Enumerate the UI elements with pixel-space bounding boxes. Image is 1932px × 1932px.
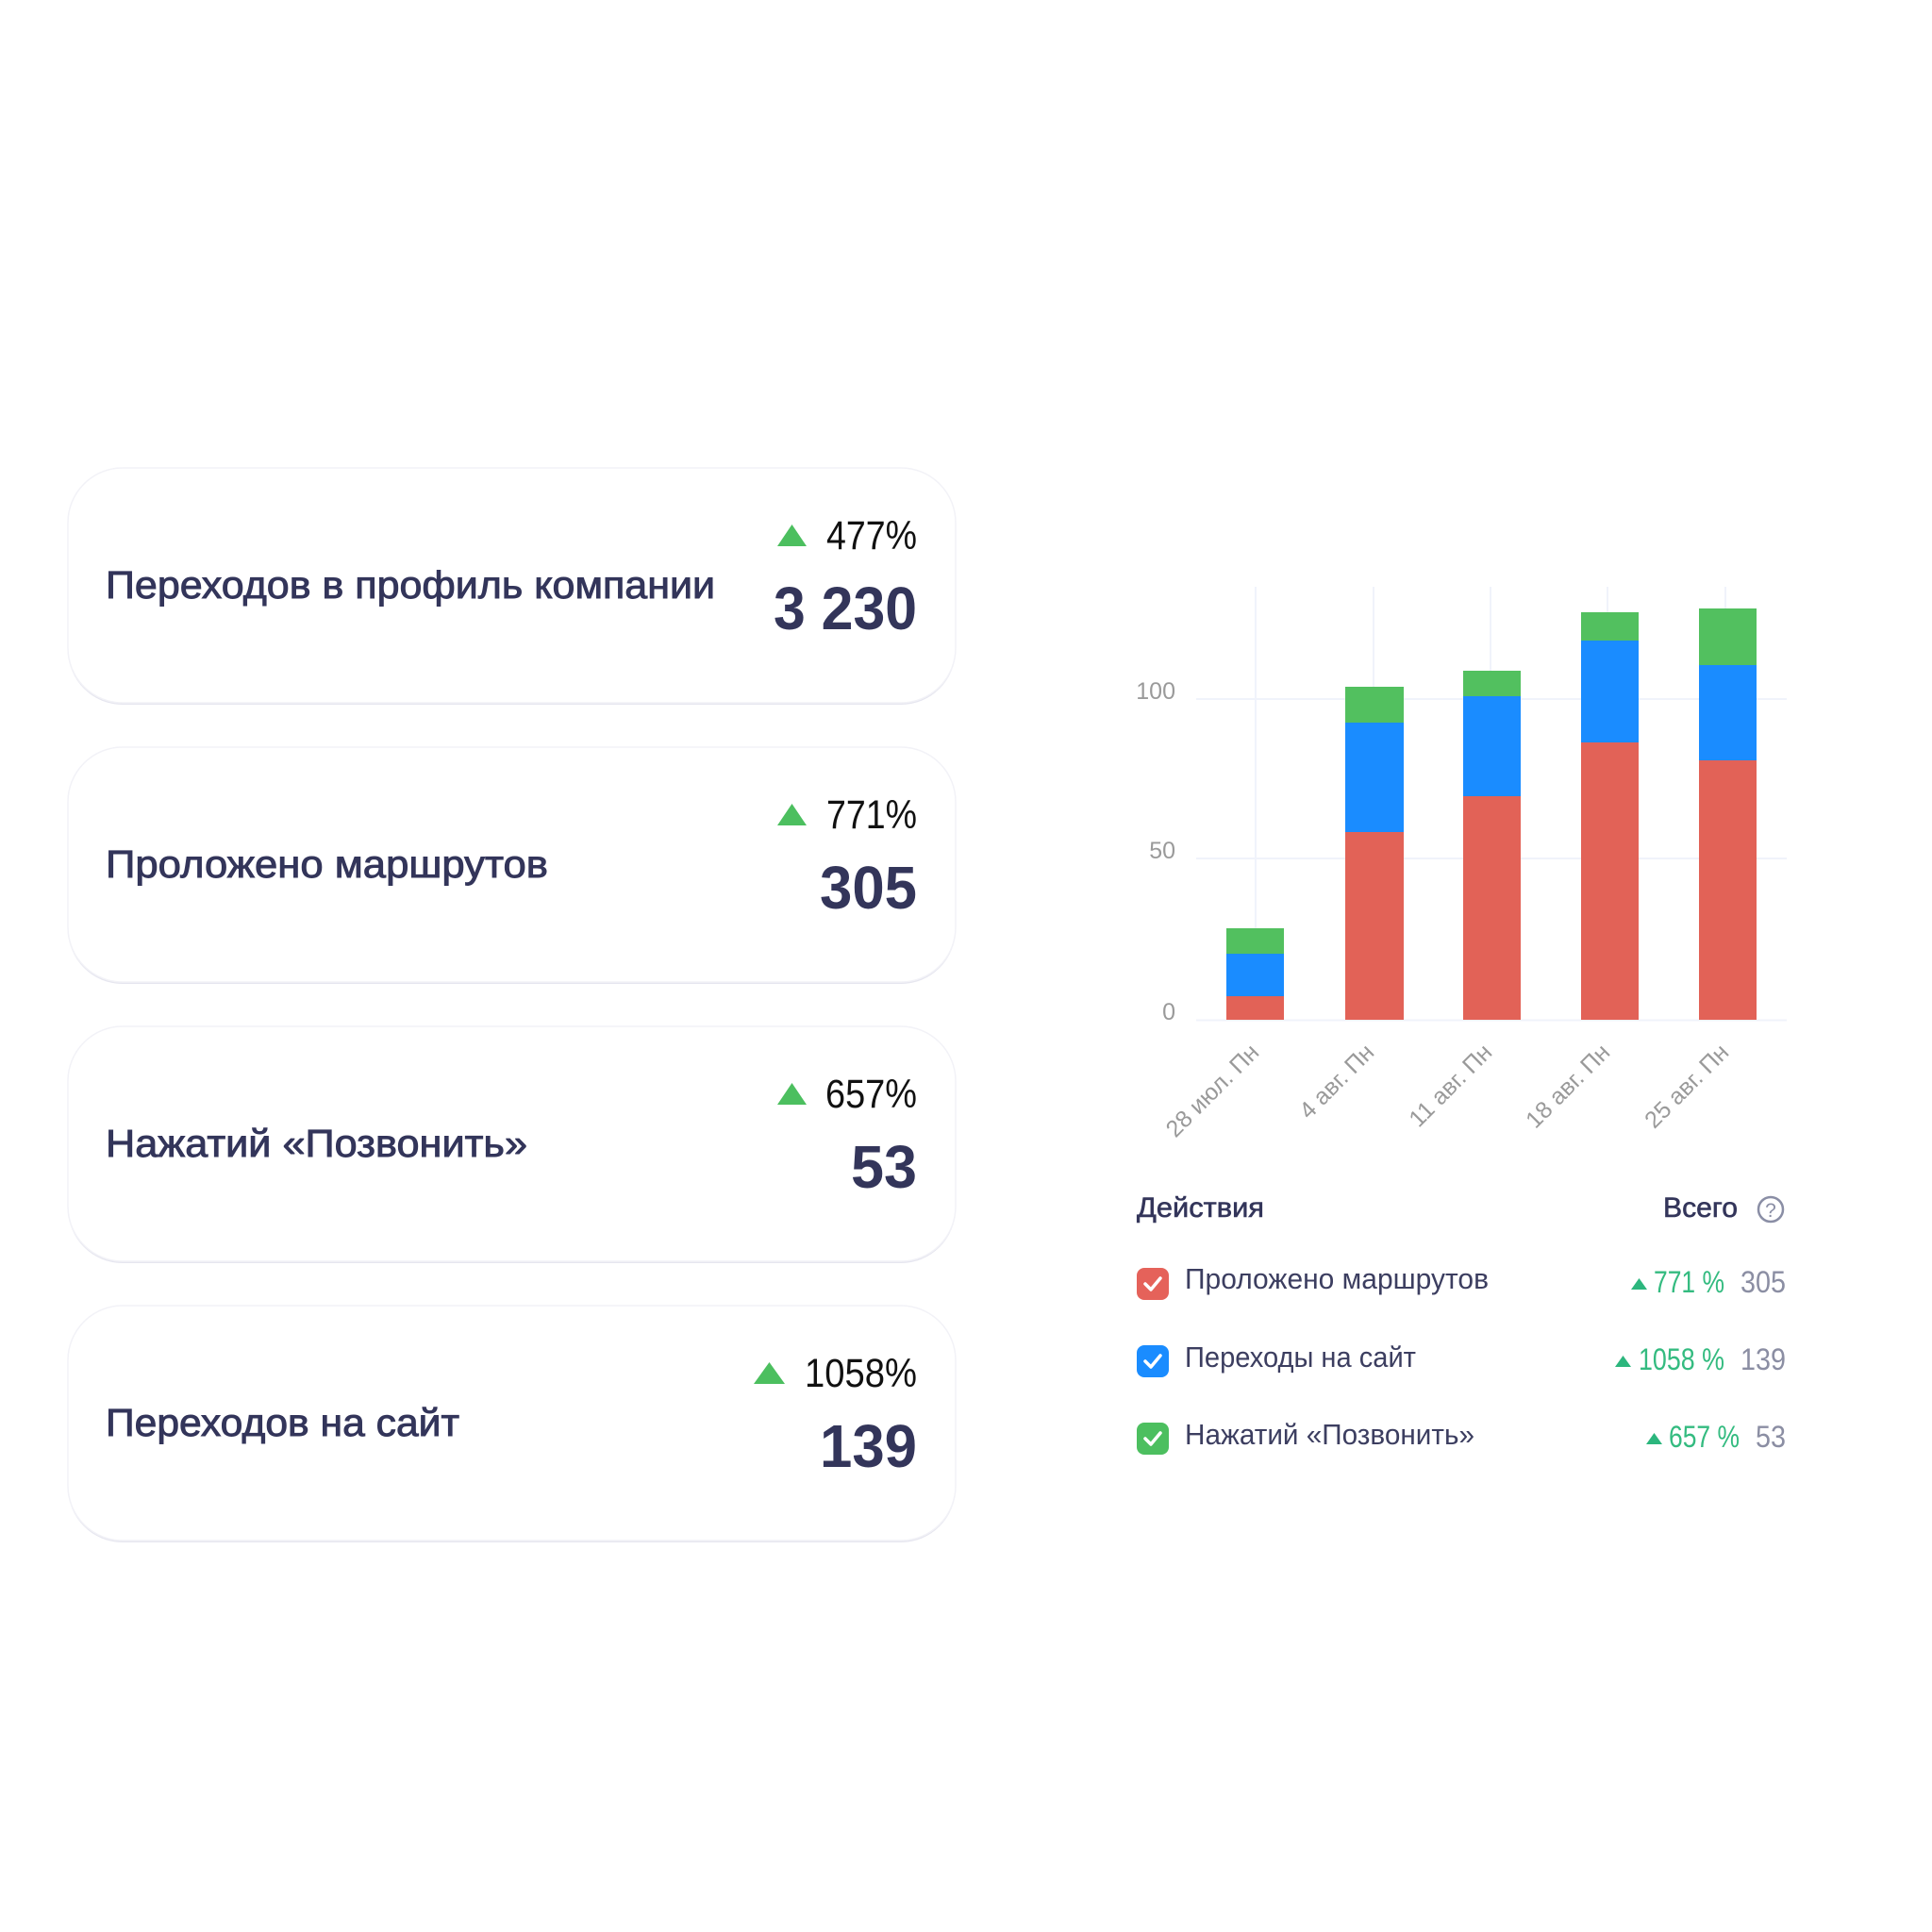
bar: 4 авг. [1345, 687, 1404, 1020]
x axis labels: 28 июл. Пн [1161, 1039, 1264, 1142]
legend header: total: Всего [1663, 1192, 1738, 1224]
y axis labels: 50 [1149, 838, 1175, 864]
icon: up triangle [777, 525, 807, 546]
legend row: routes [1137, 1262, 1786, 1300]
percent change: 1058% [805, 1351, 917, 1396]
bar: 18 авг. [1581, 612, 1639, 1020]
icon: up triangle [754, 1362, 785, 1384]
x axis labels: 25 авг. Пн [1640, 1039, 1734, 1134]
icon: help: ? [1765, 1200, 1776, 1222]
legend row: site visits: 1058 % [1639, 1342, 1724, 1376]
heading: site visits: Переходов на сайт [106, 1401, 459, 1444]
legend row: call clicks [1137, 1418, 1786, 1455]
x axis labels: 18 авг. Пн [1521, 1039, 1615, 1134]
y axis labels: 0 [1162, 999, 1175, 1025]
icon: help [1758, 1197, 1783, 1222]
bar: 28 июл. [1226, 928, 1284, 1020]
legend row: call clicks: 53 [1756, 1420, 1786, 1454]
icon: red checkbox [1137, 1268, 1169, 1300]
legend row: call clicks: 657 % [1669, 1420, 1740, 1454]
heading: call clicks: Нажатий «Позвонить» [106, 1122, 527, 1165]
legend row: routes: Проложено маршрутов [1185, 1262, 1489, 1295]
bar: 25 авг. [1699, 608, 1757, 1020]
stacked bar chart [1136, 587, 1787, 1142]
legend table [1137, 1192, 1786, 1455]
percent change: 657% [825, 1072, 917, 1117]
x axis labels: 11 авг. Пн [1404, 1039, 1497, 1132]
panel: profile visits card [68, 468, 956, 705]
icon: up triangle [777, 804, 807, 825]
heading: routes: Проложено маршрутов [106, 842, 548, 886]
total value: 3 230 [774, 575, 917, 642]
legend header: actions: Действия [1137, 1192, 1264, 1224]
heading: profile visits: Переходов в профиль компании [106, 563, 715, 607]
total value: 53 [851, 1133, 917, 1201]
panel: site visits card [68, 1306, 956, 1542]
x axis labels: 4 авг. Пн [1294, 1039, 1379, 1124]
percent change: 477% [826, 513, 917, 558]
icon: blue checkbox [1137, 1345, 1169, 1377]
y axis labels [1136, 678, 1175, 1025]
panel: call clicks card [68, 1026, 956, 1263]
legend row: site visits: 139 [1740, 1342, 1786, 1376]
legend row: site visits [1137, 1341, 1786, 1377]
x axis labels [1161, 1039, 1734, 1142]
legend row: routes: 771 % [1654, 1265, 1724, 1299]
total value: 305 [820, 854, 917, 922]
icon: green checkbox [1137, 1423, 1169, 1455]
total value: 139 [820, 1412, 917, 1480]
panel: routes card [68, 747, 956, 984]
percent change: 771% [826, 792, 917, 838]
y axis labels: 100 [1136, 678, 1175, 705]
legend row: call clicks: Нажатий «Позвонить» [1185, 1418, 1474, 1451]
legend row: routes: 305 [1740, 1265, 1786, 1299]
bar: 11 авг. [1463, 671, 1521, 1020]
legend row: site visits: Переходы на сайт [1185, 1341, 1416, 1374]
icon: up triangle [777, 1083, 807, 1105]
